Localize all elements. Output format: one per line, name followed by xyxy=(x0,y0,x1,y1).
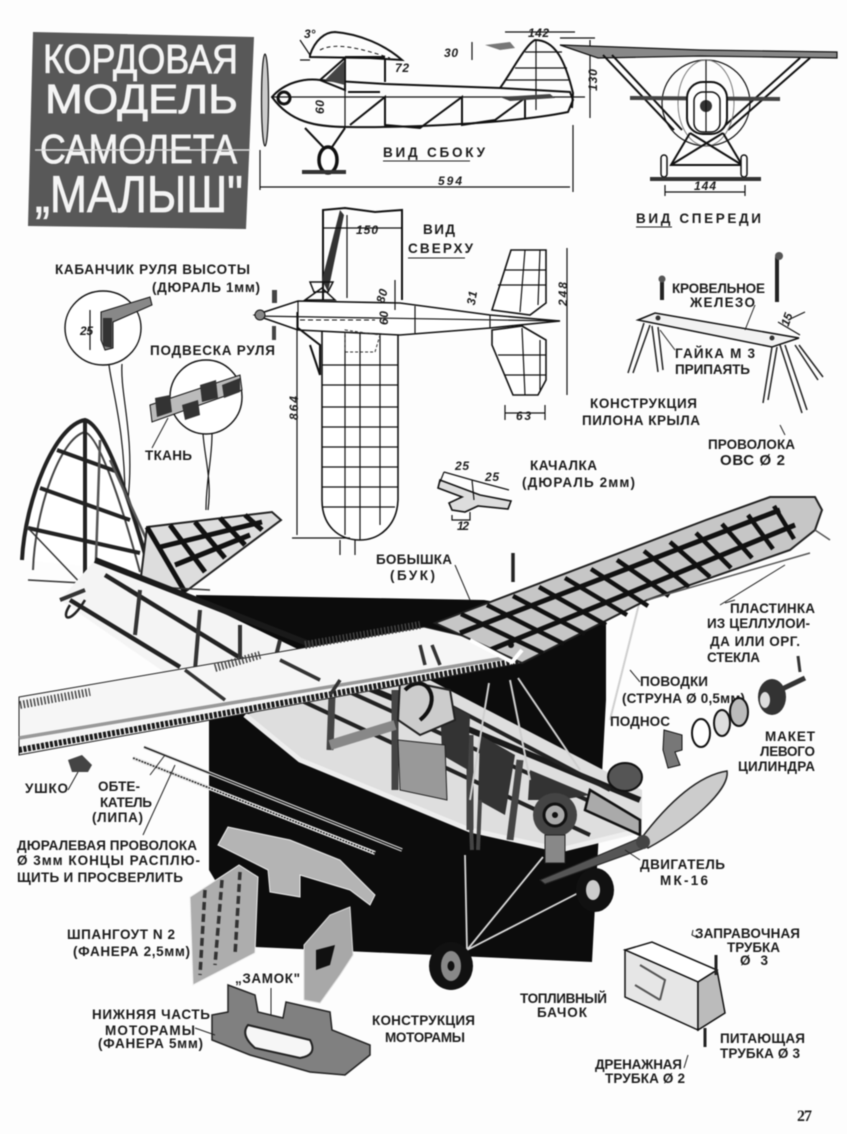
label: fabric xyxy=(145,418,192,463)
label: feed tube xyxy=(720,1031,805,1061)
label: nut: ПРИПАЯТЬ xyxy=(675,362,750,377)
label: wire: ОВС Ø 2 xyxy=(720,452,785,469)
label: dummy cylinder: ЛЕВОГО xyxy=(760,744,815,759)
page number: 27 xyxy=(797,1108,812,1125)
fuselage top xyxy=(255,301,560,335)
label: motor mount construction xyxy=(372,1013,475,1045)
label: plate: СТЕКЛА xyxy=(707,650,760,665)
pylon construction drawing xyxy=(628,252,823,413)
landing gear front xyxy=(671,133,742,165)
top view dimensions: 31 xyxy=(464,290,480,306)
label: roofing iron xyxy=(672,281,765,330)
label: bellcrank: КАЧАЛКА xyxy=(530,458,597,473)
right wing lattice xyxy=(435,497,830,663)
label: boss: (БУК) xyxy=(390,568,435,583)
rear fuselage lattice xyxy=(60,560,312,690)
label: dummy cylinder: МАКЕТ xyxy=(765,729,816,744)
label: boss: БОБЫШКА xyxy=(376,552,452,567)
side view dimensions: 60 xyxy=(313,100,327,114)
label: drain tube: ТРУБКА Ø 2 xyxy=(605,1071,685,1086)
tailplane side xyxy=(500,94,555,101)
callout: elevator horn lens: 25 xyxy=(79,324,93,338)
label: fabric: ТКАНЬ xyxy=(145,448,192,463)
label: engine xyxy=(625,850,725,888)
top view dimensions: 80 xyxy=(373,287,391,305)
propeller disc xyxy=(662,60,750,146)
label: fuel tank: БАЧОК xyxy=(537,1005,588,1020)
side view dimensions: 142 xyxy=(528,26,549,40)
label: feed tube: ПИТАЮЩАЯ xyxy=(720,1031,805,1046)
label: rudder suspension: ПОДВЕСКА РУЛЯ xyxy=(150,343,275,358)
dim lines side xyxy=(260,32,595,192)
stabilizer perspective xyxy=(27,512,281,592)
label: ear: УШКО xyxy=(25,781,68,796)
landing gear side xyxy=(305,128,345,150)
filler tube xyxy=(714,955,718,975)
spinner and cylinders xyxy=(272,290,277,340)
top view dimensions: 248 xyxy=(556,282,570,307)
plywood former 1 xyxy=(190,865,258,985)
label: plate: ИЗ ЦЕЛЛУЛОИ- xyxy=(707,616,810,631)
label: former N2 xyxy=(67,927,190,959)
label: nut xyxy=(660,330,755,377)
landing gear struts xyxy=(465,855,584,950)
icon: main wheel xyxy=(429,942,473,990)
screw long xyxy=(775,257,779,302)
callout: fabric hinge lens xyxy=(150,360,242,510)
label: filler tube: ЗАПРАВОЧНАЯ xyxy=(695,926,800,941)
top view dimensions: 63 xyxy=(516,409,531,423)
top view dimensions xyxy=(287,223,570,423)
title block xyxy=(28,32,254,229)
label: drain tube xyxy=(595,1055,688,1086)
top view dimensions: 864 xyxy=(287,396,301,420)
label: pylon construction: КОНСТРУКЦИЯ xyxy=(590,396,697,411)
label: side view: ВИД СБОКУ xyxy=(383,145,486,160)
side view dimensions: 30 xyxy=(444,46,458,60)
side view dimensions: 594 xyxy=(438,174,462,188)
feed tube xyxy=(704,1028,706,1047)
title block: КОРДОВАЯ xyxy=(43,36,238,82)
top view drawing xyxy=(255,208,567,555)
pylon side xyxy=(320,58,385,92)
label: ear xyxy=(25,772,78,796)
engine xyxy=(470,790,640,863)
stabilizer top upper xyxy=(492,250,546,315)
label: motor mount construction: КОНСТРУКЦИЯ xyxy=(372,1013,475,1028)
label: leads: (СТРУНА Ø 0,5мм) xyxy=(622,691,745,706)
label: lock xyxy=(235,971,300,1015)
label: dural wire xyxy=(17,765,200,885)
fuselage front xyxy=(687,82,727,134)
plywood wing rib piece xyxy=(218,827,375,905)
label: feed tube: ТРУБКА Ø 3 xyxy=(720,1046,800,1061)
title block: „МАЛЫШ" xyxy=(35,166,243,224)
label: engine: МК-16 xyxy=(660,873,708,888)
label: pylon construction: ПИЛОНА КРЫЛА xyxy=(582,413,700,428)
label: leads xyxy=(622,670,745,706)
label: lock: „ЗАМОК" xyxy=(235,971,300,986)
label: plate: ПЛАСТИНКА xyxy=(730,601,815,616)
dark bays between frames xyxy=(440,700,590,815)
fuel tank xyxy=(625,942,725,1047)
label: boss xyxy=(376,552,470,600)
propeller side xyxy=(262,54,268,146)
label: tray: ПОДНОС xyxy=(610,714,670,729)
callout: elevator horn lens xyxy=(65,291,152,500)
left wing xyxy=(19,625,522,755)
wing struts xyxy=(470,600,640,800)
label: motor mount construction: МОТОРАМЫ xyxy=(385,1030,465,1045)
label: elevator horn: КАБАНЧИК РУЛЯ ВЫСОТЫ xyxy=(55,262,250,277)
label: filler tube: Ø 3 xyxy=(740,953,768,968)
icon: dummy cylinder parts xyxy=(692,656,805,747)
label: dummy cylinder: ЦИЛИНДРА xyxy=(738,759,815,774)
label: plate xyxy=(707,565,815,665)
title block: САМОЛЕТА xyxy=(40,126,238,172)
label: top view: СВЕРХУ xyxy=(408,241,474,256)
bellcrank drawing: 25 xyxy=(484,470,499,484)
plywood former in fuselage xyxy=(398,740,447,800)
label: roofing iron: ЖЕЛЕЗО xyxy=(689,295,755,310)
label: lower motor mount part: (ФАНЕРА 5мм) xyxy=(98,1036,203,1051)
label: wire xyxy=(708,425,795,469)
screw short xyxy=(660,277,664,300)
wing pylon top xyxy=(305,282,335,300)
label: top view: ВИД xyxy=(423,222,455,237)
label: lower motor mount part: НИЖНЯЯ ЧАСТЬ xyxy=(92,1007,210,1022)
label: dural wire: ЩИТЬ И ПРОСВЕРЛИТЬ xyxy=(17,870,183,885)
propeller xyxy=(540,771,727,884)
label: nut: ГАЙКА М 3 xyxy=(675,346,755,361)
label: leading edge: (ЛИПА) xyxy=(92,810,143,825)
label: elevator horn xyxy=(55,262,260,295)
label: drain tube: ДРЕНАЖНАЯ xyxy=(595,1057,682,1072)
label: elevator horn: (ДЮРАЛЬ 1мм) xyxy=(152,280,260,295)
label: top view xyxy=(408,222,474,258)
label: wire: ПРОВОЛОКА xyxy=(708,437,795,452)
black background block xyxy=(196,595,606,962)
fin side xyxy=(500,40,573,108)
title block: МОДЕЛЬ xyxy=(45,76,238,122)
main fuselage frame xyxy=(245,660,642,863)
bellcrank drawing: 25 xyxy=(454,459,469,473)
label: lower motor mount part xyxy=(92,1007,215,1051)
side view dimensions: 3° xyxy=(304,27,316,41)
dim lines top xyxy=(292,228,567,538)
fuselage side xyxy=(272,80,573,127)
label: pylon construction xyxy=(582,396,700,428)
side view dimensions: 130 xyxy=(586,69,600,91)
bellcrank drawing: 12 xyxy=(457,519,469,533)
bellcrank drawing xyxy=(438,459,511,533)
label: dummy cylinder xyxy=(738,729,816,774)
front view drawing xyxy=(560,45,837,196)
label: former N2: (ФАНЕРА 2,5мм) xyxy=(73,944,190,959)
top view dimensions: 150 xyxy=(356,223,378,237)
wing front xyxy=(560,45,837,58)
plywood former 2 xyxy=(304,907,353,1003)
dural wire rods xyxy=(133,747,402,853)
label: front view: ВИД СПЕРЕДИ xyxy=(636,211,761,226)
label: filler tube xyxy=(692,926,800,968)
label: leads: ПОВОДКИ xyxy=(640,674,708,689)
tailplane front xyxy=(630,96,780,101)
label: filler tube: ТРУБКА xyxy=(727,940,780,955)
label: fuel tank xyxy=(520,991,607,1020)
front view dimension: 144 xyxy=(694,179,716,193)
fin rudder perspective xyxy=(22,420,165,590)
label: roofing iron: КРОВЕЛЬНОЕ xyxy=(672,281,765,296)
label: bellcrank xyxy=(522,458,635,490)
label: dural wire: Ø 3мм КОНЦЫ РАСПЛЮ- xyxy=(17,853,200,868)
wing profile side xyxy=(310,32,402,60)
side view dimensions: 72 xyxy=(395,61,409,75)
label: plate: ДА ИЛИ ОРГ. xyxy=(710,634,800,649)
wing-fixing screw xyxy=(511,553,515,582)
label: leading edge: ОБТЕ- xyxy=(98,779,140,794)
label: leading edge xyxy=(92,755,165,825)
stabilizer top lower xyxy=(492,326,546,395)
icon: ear xyxy=(68,755,92,772)
icon: tray bracket xyxy=(663,730,682,768)
label: fuel tank: ТОПЛИВНЫЙ xyxy=(520,991,607,1006)
motor mount lower part xyxy=(212,985,370,1075)
label: bellcrank: (ДЮРАЛЬ 2мм) xyxy=(522,475,635,490)
label: lower motor mount part: МОТОРАМЫ xyxy=(105,1023,195,1038)
side view dimensions xyxy=(304,26,600,188)
icon: second wheel xyxy=(576,868,614,912)
top view dimensions: 60 xyxy=(377,311,391,325)
wing top xyxy=(323,208,402,300)
label: dural wire: ДЮРАЛЕВАЯ ПРОВОЛОКА xyxy=(17,838,197,853)
label: former N2: ШПАНГОУТ N 2 xyxy=(67,927,175,942)
icon: spare cylinder xyxy=(608,763,642,791)
side view drawing xyxy=(260,32,595,192)
label: engine: ДВИГАТЕЛЬ xyxy=(640,857,725,872)
pylon construction drawing: 15 xyxy=(778,311,796,328)
label: leading edge: КАТЕЛЬ xyxy=(100,795,152,810)
